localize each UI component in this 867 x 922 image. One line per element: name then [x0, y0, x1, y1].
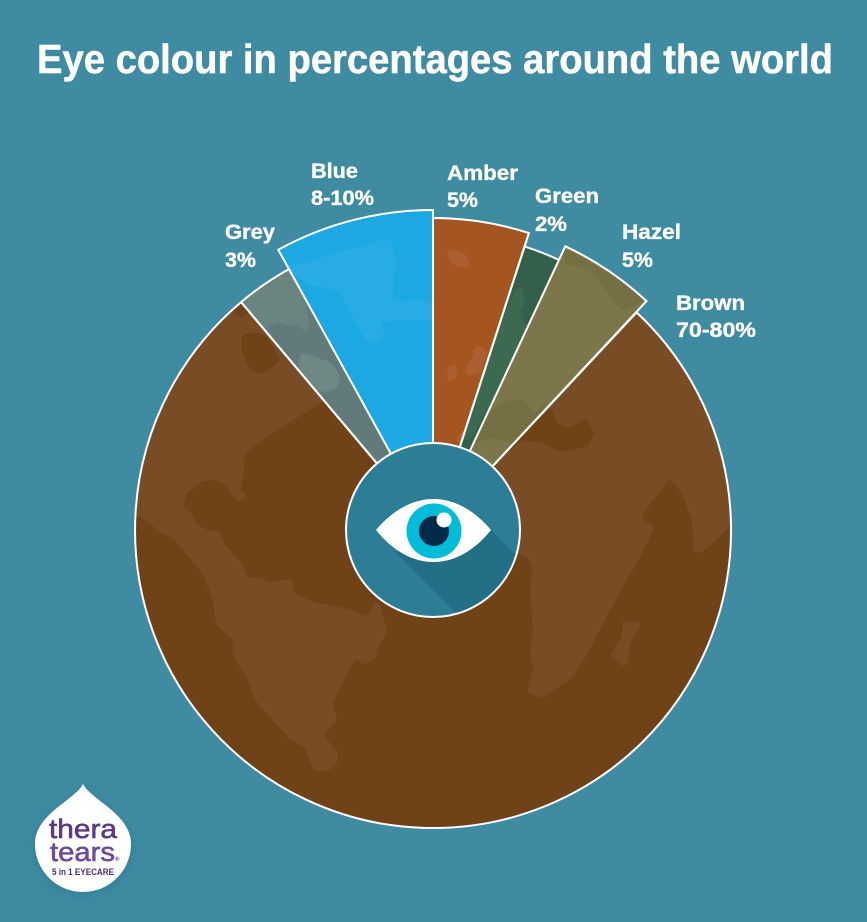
label: brown: Brown: [676, 292, 745, 315]
eye badge: [345, 442, 521, 618]
logo: thera tears: [35, 784, 131, 894]
logo: thera tears: ®: [115, 856, 120, 863]
slice: grey 3%: [242, 270, 390, 462]
slice: green 2%: [461, 248, 558, 450]
icon: eye: [376, 499, 491, 562]
label: blue: 8-10%: [311, 187, 374, 210]
label: green: Green: [535, 185, 599, 208]
slice: blue 8-10%: [280, 211, 432, 452]
logo: thera tears: thera: [49, 814, 118, 844]
label: hazel: [622, 221, 681, 272]
slice: amber 5%: [434, 219, 528, 446]
logo: thera tears: tears: [50, 837, 115, 867]
label: blue: [311, 160, 374, 210]
label: amber: [447, 162, 518, 212]
slice: hazel 5%: [471, 248, 645, 465]
label: green: [535, 185, 599, 236]
label: hazel: 5%: [622, 249, 653, 272]
label: brown: [676, 292, 756, 342]
label: amber: 5%: [447, 189, 478, 212]
label: grey: Grey: [225, 221, 275, 244]
logo: thera tears: 5 in 1 EYECARE: [52, 867, 114, 878]
label: amber: Amber: [447, 162, 518, 185]
title: Eye colour in percentages around the world: [37, 36, 833, 82]
label: brown: 70-80%: [676, 319, 756, 342]
pie chart: [110, 210, 745, 828]
slice borders: [135, 210, 731, 828]
label: grey: 3%: [225, 249, 256, 272]
label: blue: Blue: [311, 160, 358, 183]
label: grey: [225, 221, 275, 272]
label: hazel: Hazel: [622, 221, 681, 244]
eye long shadow: [396, 530, 516, 613]
slice: brown 70-80%: [136, 304, 730, 827]
label: green: 2%: [535, 213, 567, 236]
